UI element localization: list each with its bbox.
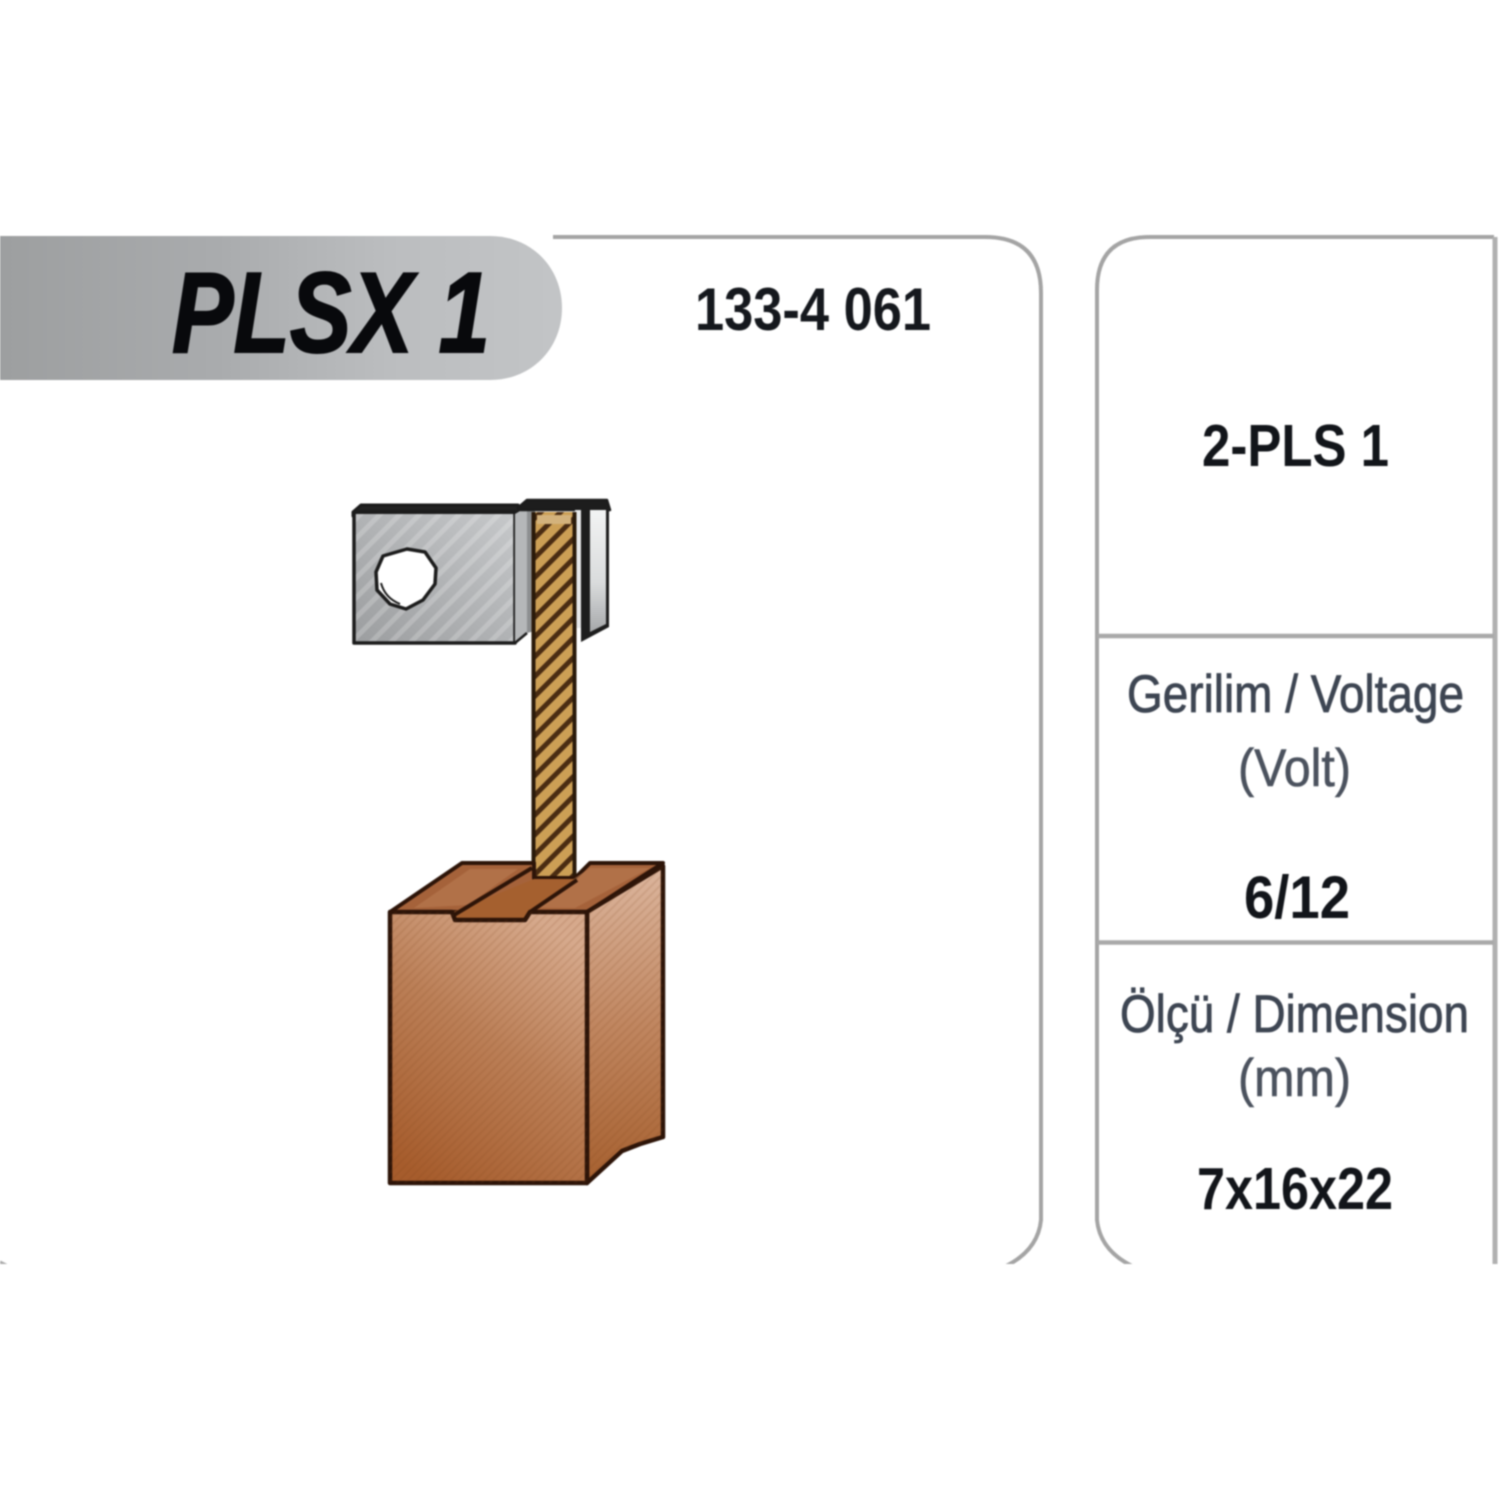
- panel: right specification frame: [1097, 237, 1495, 1266]
- dimension value: 7x16x22: [1197, 1156, 1393, 1222]
- product illustration: carbon brush: [353, 500, 663, 1183]
- spec: brush set code: 2-PLS 1: [1202, 413, 1389, 479]
- dimension unit: (mm): [1238, 1049, 1351, 1108]
- title badge: [0, 236, 562, 380]
- icon: braided copper wire: [534, 512, 574, 876]
- spec: voltage: [1127, 665, 1464, 931]
- icon: metal terminal bracket: [353, 500, 610, 643]
- icon: mounting hole: [376, 549, 436, 609]
- icon: carbon brush block: [390, 863, 663, 1183]
- voltage unit: (Volt): [1238, 739, 1351, 798]
- voltage value: 6/12: [1244, 864, 1350, 931]
- panel: left product frame: [0, 237, 1041, 1266]
- title: PLSX 1: [172, 250, 490, 377]
- part number: 133-4 061: [695, 276, 931, 343]
- spec: dimension: [1120, 985, 1469, 1222]
